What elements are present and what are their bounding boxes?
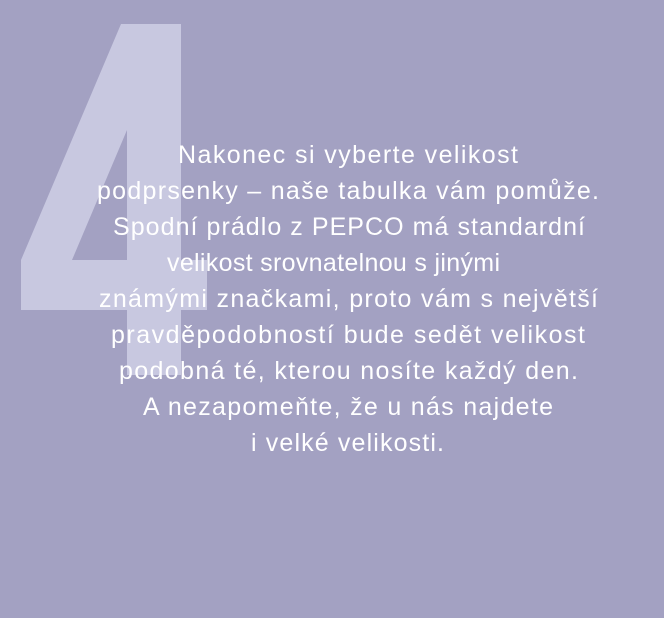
body text: A nezapomeňte, že u nás najdete	[143, 393, 553, 421]
body text: i velké velikosti.	[251, 429, 444, 457]
body text: pravděpodobností bude sedět velikost	[111, 321, 585, 349]
large numeral 4	[21, 24, 207, 375]
body text	[97, 141, 599, 457]
body text: velikost srovnatelnou s jinými	[167, 249, 500, 277]
body text: Nakonec si vyberte velikost	[178, 141, 518, 169]
body text: podobná té, kterou nosíte každý den.	[119, 357, 578, 385]
body text: Spodní prádlo z PEPCO má standardní	[113, 213, 585, 241]
body text: známými značkami, proto vám s největší	[99, 285, 598, 313]
body text: podprsenky – naše tabulka vám pomůže.	[97, 177, 599, 205]
